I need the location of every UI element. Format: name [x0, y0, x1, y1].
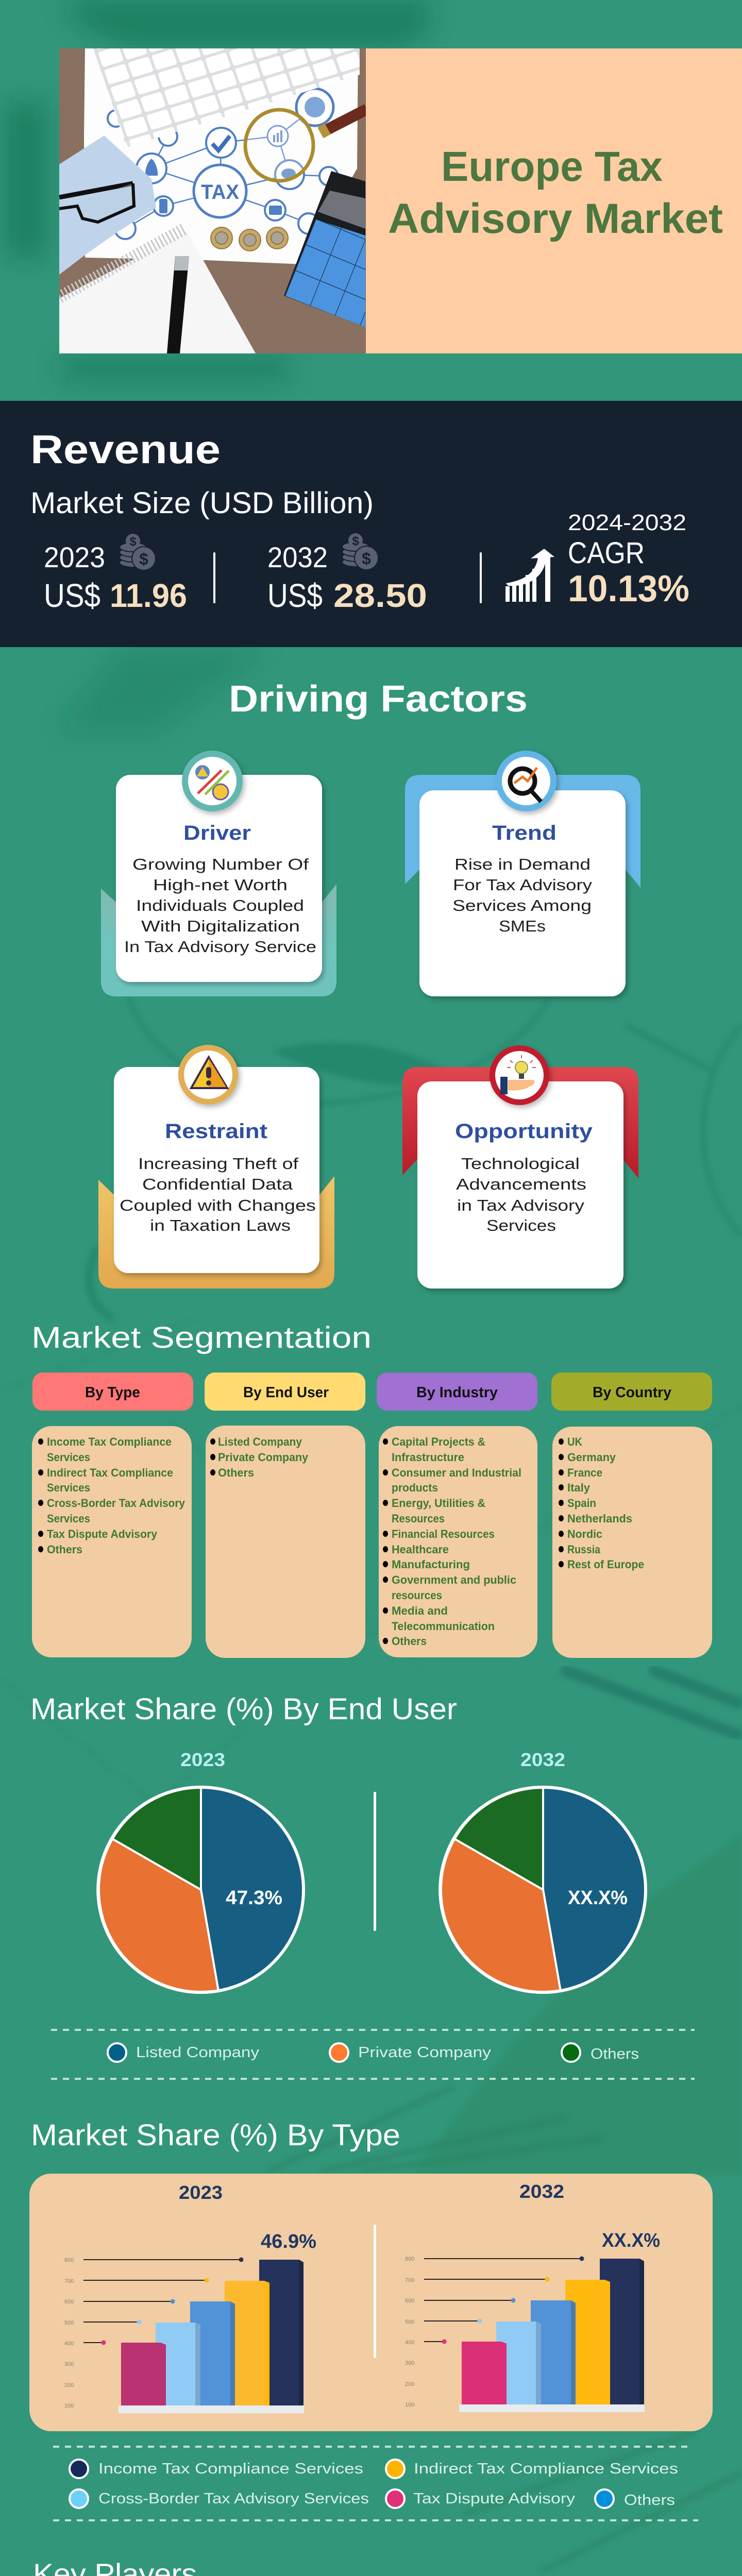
panel: by type list: Cross-Border Tax Advisory [47, 1497, 185, 1510]
panel: by type list: Indirect Tax Compliance [47, 1466, 173, 1479]
blue folder [59, 135, 156, 275]
bar chart 2032: 100 [405, 2402, 414, 2408]
panel: restraint [98, 1045, 334, 1289]
legend: end user: Listed Company [136, 2044, 260, 2061]
value 2032: 28.50 [333, 577, 427, 614]
value 2032: 2032 [267, 541, 328, 573]
driver text [124, 855, 316, 956]
legend: end user [51, 2030, 695, 2079]
market size subtitle: Market Size (USD Billion) [30, 486, 374, 520]
icon: coins 2023 [120, 534, 156, 570]
panel: by country list: Spain [567, 1497, 596, 1510]
trend heading: Trend [492, 822, 556, 844]
header: by industry [377, 1372, 537, 1411]
title: Advisory Market [388, 195, 723, 242]
bar chart 2032: 200 [405, 2381, 414, 2387]
bar chart 2032: 800 [405, 2256, 414, 2262]
bar chart 2023: 200 [64, 2382, 74, 2388]
paper with tax network: TAX [201, 181, 239, 204]
paper with tax network [84, 48, 358, 264]
calculator [284, 171, 365, 327]
notebook with spiral [59, 229, 256, 353]
panel: by industry list: Government and public [392, 1573, 516, 1586]
trend text: SMEs [499, 917, 546, 935]
revenue heading: Revenue [30, 427, 221, 472]
value 2023: 2023 [44, 541, 105, 573]
opportunity text: Technological [461, 1155, 580, 1173]
opportunity text: in Tax Advisory [457, 1196, 585, 1214]
pie chart 2032 [440, 1749, 646, 1993]
panel: by country list: Netherlands [567, 1512, 632, 1525]
title: Europe Tax [441, 143, 663, 190]
segmentation headers [32, 1372, 712, 1411]
driver heading: Driver [183, 822, 251, 844]
legend: end user: Private Company [358, 2044, 492, 2061]
revenue band [0, 401, 742, 647]
panel: by industry list: Resources [392, 1512, 445, 1525]
pie chart 2032: XX.X% [568, 1887, 628, 1909]
opportunity text: Services [486, 1216, 556, 1234]
CAGR [568, 510, 689, 609]
bar chart 2023: 2023 [179, 2182, 223, 2203]
restraint heading: Restraint [165, 1120, 267, 1143]
bar chart 2032 [405, 2181, 660, 2412]
panel: by country list [552, 1427, 712, 1658]
bar chart 2023: 300 [64, 2361, 74, 2367]
icon: coins 2023: $ [139, 550, 148, 568]
restraint text: Confidential Data [142, 1175, 293, 1193]
title panel [366, 48, 742, 353]
bar chart 2023: 400 [64, 2341, 74, 2347]
driving factors heading: Driving Factors [229, 679, 528, 720]
panel: by type list: Services [47, 1512, 90, 1525]
value 2023 [44, 541, 187, 614]
panel: by industry list: Telecommunication [392, 1620, 495, 1633]
header: by type: By Type [85, 1384, 140, 1401]
CAGR: CAGR [568, 536, 645, 570]
legend: type: Income Tax Compliance Services [98, 2461, 363, 2477]
icon: coins 2023: $ [129, 535, 137, 549]
icon: growth arrow [505, 549, 554, 602]
trend text [452, 855, 593, 935]
driver text: Individuals Coupled [136, 896, 304, 914]
icon: idea in hand [490, 1045, 549, 1105]
bar chart 2023: 46.9% [261, 2231, 316, 2252]
panel: by industry list: Others [392, 1635, 427, 1648]
bar chart 2032: 600 [405, 2298, 414, 2304]
panel: by end user list: Others [218, 1466, 254, 1479]
bar chart 2023: 100 [64, 2403, 74, 2409]
panel: trend [405, 751, 640, 996]
bar chart 2032: 300 [405, 2360, 414, 2366]
restraint text: Coupled with Changes [120, 1196, 316, 1214]
panel: by industry list: Healthcare [392, 1543, 449, 1556]
header: by end user: By End User [243, 1384, 329, 1401]
driver text: High-net Worth [153, 876, 288, 894]
panel: by industry list: Energy, Utilities & [392, 1497, 485, 1510]
panel: by type list: Income Tax Compliance [47, 1435, 172, 1448]
panel: by industry list: resources [392, 1589, 442, 1602]
panel: by industry list: Consumer and Industrial [392, 1466, 521, 1479]
trend text: For Tax Advisory [453, 876, 593, 894]
panel: by type list: Others [47, 1543, 82, 1556]
restraint text: Increasing Theft of [138, 1155, 298, 1173]
panel: by country list: Rest of Europe [567, 1558, 644, 1571]
legend: type [53, 2447, 698, 2520]
icon: warning triangle [178, 1045, 238, 1105]
title [388, 143, 723, 242]
value 2032 [267, 541, 427, 614]
panel: by industry list: Infrastructure [392, 1451, 464, 1464]
panel: by industry list [379, 1426, 537, 1657]
panel: by country list: UK [567, 1435, 582, 1448]
restraint text [120, 1155, 316, 1234]
panel: by industry list: Media and [392, 1604, 448, 1617]
driver text: In Tax Advisory Service [124, 938, 316, 956]
icon: trend magnifier [496, 751, 556, 811]
panel: by end user list: Listed Company [218, 1435, 302, 1448]
bar chart 2032: XX.X% [602, 2230, 660, 2251]
panel: by country list: France [567, 1466, 602, 1479]
opportunity heading: Opportunity [455, 1120, 593, 1143]
panel: by country list: Italy [567, 1481, 591, 1494]
legend: type: Indirect Tax Compliance Services [414, 2461, 678, 2477]
bar chart 2032: 400 [405, 2340, 414, 2346]
icon: coins 2032 [342, 533, 378, 570]
CAGR: 10.13% [568, 568, 689, 609]
pie chart 2023: 47.3% [226, 1887, 282, 1909]
pie chart 2032: 2032 [520, 1749, 565, 1770]
CAGR: 2024-2032 [568, 510, 686, 535]
bar chart 2023: 700 [64, 2278, 74, 2284]
bar chart 2023: 800 [64, 2257, 74, 2263]
header: by end user [205, 1372, 365, 1411]
opportunity text: Advancements [456, 1175, 586, 1193]
value 2023: US$ [44, 577, 100, 614]
panel: by country list: Nordic [567, 1528, 602, 1540]
icon: coins 2032: $ [352, 534, 359, 548]
panel: by industry list: Capital Projects & [392, 1435, 485, 1448]
icon: coins 2032: $ [362, 549, 371, 568]
restraint text: in Taxation Laws [150, 1216, 291, 1234]
panel: by country list: Russia [567, 1543, 601, 1556]
keyboard [93, 48, 360, 147]
opportunity text [456, 1155, 586, 1234]
divider [374, 2225, 376, 2358]
legend: end user: Others [591, 2046, 639, 2062]
market share by type heading: Market Share (%) By Type [31, 2119, 400, 2152]
value 2023: 11.96 [110, 577, 187, 614]
market segmentation heading: Market Segmentation [31, 1321, 372, 1354]
pie chart 2023 [97, 1749, 303, 1993]
legend: type: Cross-Border Tax Advisory Services [98, 2490, 369, 2507]
pen [167, 256, 189, 353]
bar chart 2032: 500 [405, 2319, 414, 2325]
driver text: With Digitalization [141, 917, 300, 935]
driver text: Growing Number Of [132, 855, 309, 873]
header: by type [32, 1372, 193, 1411]
panel: by type list: Tax Dispute Advisory [47, 1528, 158, 1540]
market share by end user heading: Market Share (%) By End User [30, 1692, 457, 1726]
icon: driver gears [182, 751, 243, 811]
panel: by end user list: Private Company [218, 1451, 309, 1464]
hero photo: tax desk scene [59, 46, 367, 353]
header: by industry: By Industry [416, 1384, 498, 1401]
bar chart 2023: 600 [64, 2299, 74, 2305]
bar chart 2032: 2032 [519, 2181, 564, 2202]
glasses [59, 183, 134, 222]
divider [213, 552, 215, 603]
panel: by type list: Services [47, 1451, 90, 1464]
trend text: Rise in Demand [454, 855, 591, 873]
panel: by end user list [206, 1426, 365, 1658]
panel: by country list: Germany [567, 1451, 616, 1464]
panel: by type list: Services [47, 1481, 90, 1494]
bar chart 2032: 700 [405, 2277, 414, 2283]
panel: driver [101, 751, 336, 996]
panel: opportunity [402, 1045, 638, 1289]
value 2032: US$ [267, 577, 323, 614]
bar chart 2023 [64, 2182, 316, 2413]
panel: by industry list: Manufacturing [392, 1558, 470, 1571]
header: by country [551, 1372, 712, 1411]
panel: by industry list: products [392, 1481, 438, 1494]
legend: type: Tax Dispute Advisory [413, 2490, 576, 2507]
legend: type: Others [624, 2492, 675, 2509]
bar chart 2023: 500 [64, 2320, 74, 2326]
coins [211, 227, 288, 251]
panel: by industry list: Financial Resources [392, 1528, 495, 1540]
panel: by type charts [29, 2174, 713, 2431]
panel: by type list [32, 1426, 192, 1657]
pie chart 2023: 2023 [180, 1749, 225, 1770]
header: by country: By Country [593, 1384, 671, 1401]
trend text: Services Among [452, 896, 592, 914]
magnifier [245, 109, 367, 181]
divider [374, 1792, 376, 1931]
divider [480, 552, 482, 603]
